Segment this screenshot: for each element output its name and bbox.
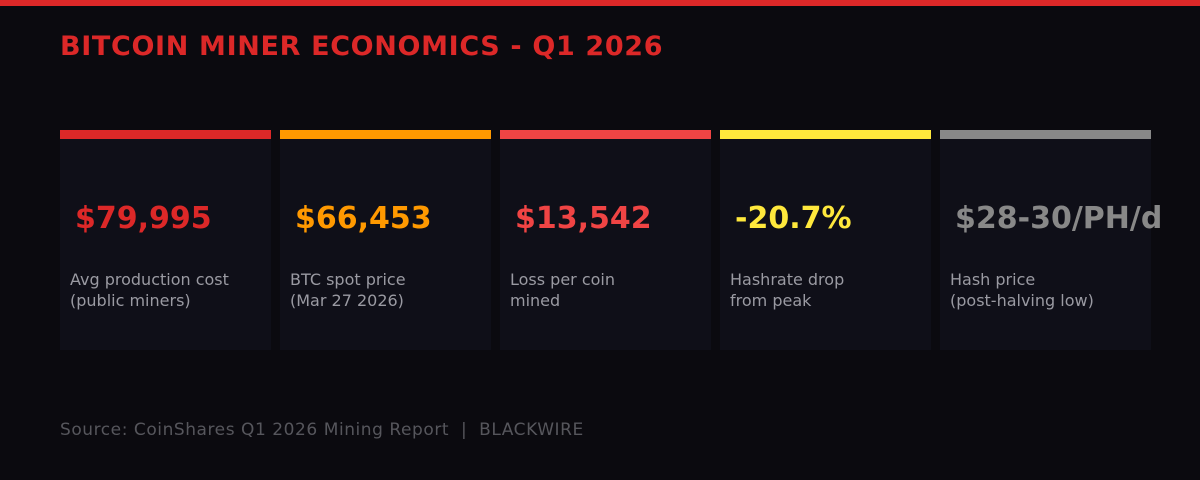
label: loss per coin <box>510 270 615 310</box>
label: hashrate drop: from peak <box>730 291 811 310</box>
value: loss per coin: $13,542 <box>515 201 652 236</box>
panel: production cost <box>60 130 271 350</box>
value: hash price: $28-30/PH/d <box>955 201 1162 236</box>
label: production cost: (public miners) <box>70 291 191 310</box>
panel: hashrate drop <box>720 130 931 350</box>
label: spot price <box>290 270 406 310</box>
title: BITCOIN MINER ECONOMICS - Q1 2026 <box>60 31 663 62</box>
value: hashrate drop: -20.7% <box>735 201 852 236</box>
label: loss per coin: mined <box>510 291 560 310</box>
panel: hash price <box>940 130 1151 350</box>
label: spot price: (Mar 27 2026) <box>290 291 404 310</box>
label: loss per coin: Loss per coin <box>510 270 615 289</box>
source footer: Source: CoinShares Q1 2026 Mining Report | BLACKWIRE <box>60 420 584 440</box>
label: hash price: (post-halving low) <box>950 291 1094 310</box>
label: spot price: BTC spot price <box>290 270 406 289</box>
value: production cost: $79,995 <box>75 201 212 236</box>
top accent bar <box>0 0 1200 6</box>
label: production cost: Avg production cost <box>70 270 229 289</box>
value: spot price: $66,453 <box>295 201 432 236</box>
label: hash price: Hash price <box>950 270 1035 289</box>
label: production cost <box>70 270 229 310</box>
label: hashrate drop <box>730 270 844 310</box>
panel: loss per coin <box>500 130 711 350</box>
label: hashrate drop: Hashrate drop <box>730 270 844 289</box>
label: hash price <box>950 270 1094 310</box>
panel: spot price <box>280 130 491 350</box>
